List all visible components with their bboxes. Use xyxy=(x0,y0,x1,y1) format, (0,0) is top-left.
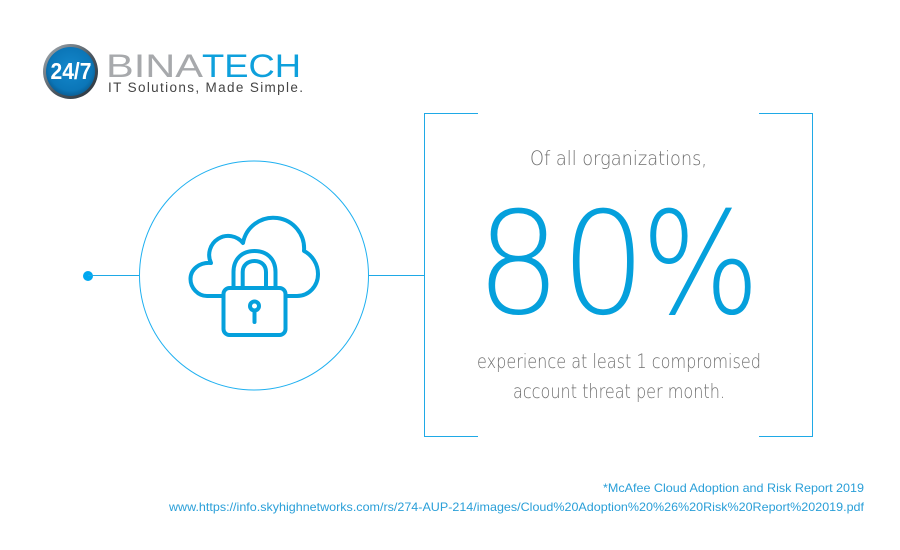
stat value: 80%: 80 xyxy=(476,182,646,347)
source citation xyxy=(168,481,865,514)
logo wordmark: BINATECH: BINA xyxy=(106,48,204,84)
icon: cloud with padlock xyxy=(190,218,318,335)
logo wordmark: BINATECH xyxy=(106,48,301,84)
circle: cloud security xyxy=(140,161,368,390)
logo badge: 24/7: 24/7 xyxy=(50,58,92,84)
source citation: www.https://info.skyhighnetworks.com/rs/274-AUP-214/images/Cloud%20Adoption%20%26%20Risk%20Report%202019.pdf xyxy=(168,500,865,514)
bracket: left xyxy=(424,114,478,436)
connector: circle to bracket xyxy=(369,274,424,276)
stat intro text: Of all organizations, xyxy=(530,147,707,170)
source citation: *McAfee Cloud Adoption and Risk Report 2019 xyxy=(603,481,864,495)
logo: Binatech xyxy=(43,44,303,99)
bracket: right xyxy=(759,114,812,436)
logo wordmark: BINATECH: TECH xyxy=(202,48,301,84)
stat description xyxy=(477,350,761,403)
connector: dot to circle xyxy=(83,271,140,281)
stat description: experience at least 1 compromised xyxy=(477,350,761,373)
logo badge: 24/7 xyxy=(43,44,98,99)
stat value: 80%: % xyxy=(641,182,760,347)
stat description: account threat per month. xyxy=(513,380,725,403)
logo tagline: IT Solutions, Made Simple. xyxy=(108,80,303,95)
